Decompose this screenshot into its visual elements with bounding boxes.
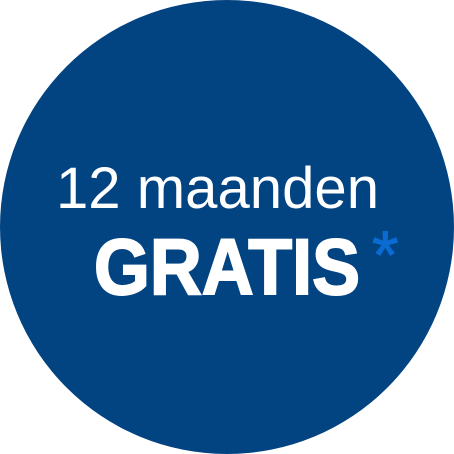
asterisk: * xyxy=(372,217,398,293)
text: GRATIS: GRATIS xyxy=(94,222,360,311)
text: 12 maanden: 12 maanden xyxy=(56,156,379,221)
